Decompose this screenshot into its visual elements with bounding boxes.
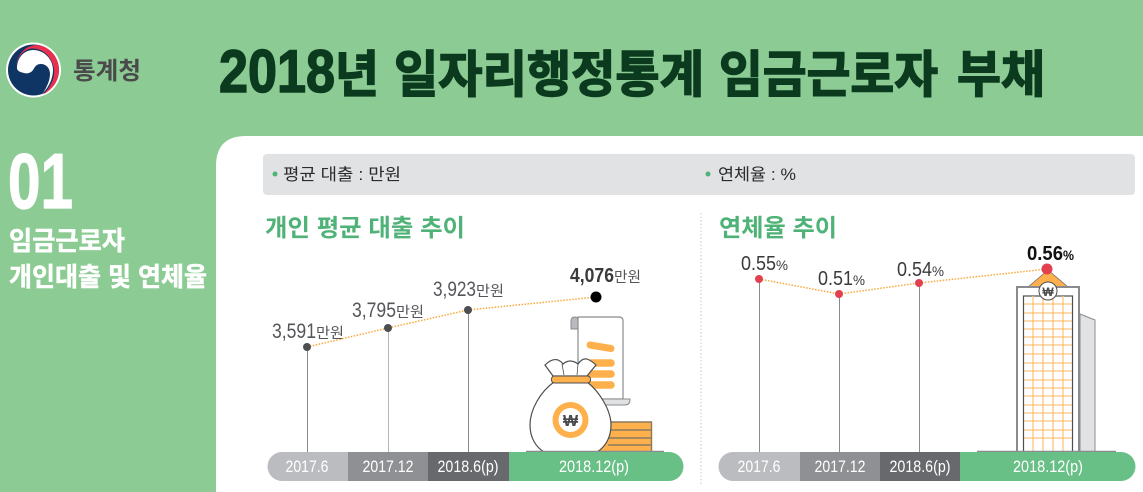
chart: average loan line: 3,795만원 — [352, 299, 424, 322]
chart: delinquency line: 0.55% — [741, 253, 788, 275]
panel: average loan heading: 개인 평균 대출 추이 — [265, 215, 465, 242]
chart: average loan line: 3,923만원 — [433, 278, 504, 301]
timeline right — [718, 452, 1136, 481]
section heading — [9, 226, 207, 292]
logo: statistics office emblem: 통계청 — [73, 58, 141, 85]
timeline left: 2018.6(p) — [438, 457, 498, 476]
chart: delinquency line: 0.56% — [1027, 243, 1074, 265]
timeline right: 2017.6 — [738, 457, 780, 476]
title: 임금근로자 — [719, 47, 938, 103]
timeline left: 2018.12(p) — [559, 457, 629, 476]
icon: document and money bag with coins — [530, 317, 652, 452]
legend bar: 평균 대출 : 만원 — [283, 165, 401, 184]
timeline left — [268, 452, 684, 481]
panel: delinquency heading: 연체율 추이 — [719, 215, 837, 242]
legend bar: 연체율 : % — [718, 165, 796, 184]
legend bar — [263, 154, 1135, 195]
timeline left: 2017.12 — [362, 457, 414, 476]
chart: average loan line: 4,076만원 — [570, 265, 641, 287]
timeline right: 2017.12 — [814, 457, 866, 476]
title: 2018 — [219, 38, 335, 105]
timeline right: 2018.12(p) — [1013, 457, 1083, 476]
chart: delinquency line — [741, 243, 1074, 452]
title — [219, 38, 1045, 105]
icon: document and money bag with coins: ₩ — [563, 413, 579, 430]
timeline right: 2018.6(p) — [890, 457, 950, 476]
icon: bank building — [1017, 264, 1095, 452]
title: 년 — [335, 47, 379, 103]
chart: average loan line — [272, 265, 641, 452]
section number: 01 — [8, 137, 73, 225]
title: 부채 — [957, 47, 1045, 103]
baseline left — [526, 450, 664, 452]
title: 일자리행정통계 — [394, 47, 704, 103]
section heading: 임금근로자 — [9, 226, 125, 256]
baseline right — [977, 450, 1116, 452]
section heading: 개인대출 및 연체율 — [9, 262, 207, 292]
icon: bank building: ₩ — [1042, 285, 1054, 299]
main white panel — [216, 136, 1143, 492]
chart: average loan line: 3,591만원 — [272, 320, 344, 343]
chart: delinquency line: 0.51% — [818, 268, 865, 290]
chart: delinquency line: 0.54% — [897, 259, 944, 281]
timeline left: 2017.6 — [286, 457, 328, 476]
logo: statistics office emblem — [6, 42, 141, 98]
